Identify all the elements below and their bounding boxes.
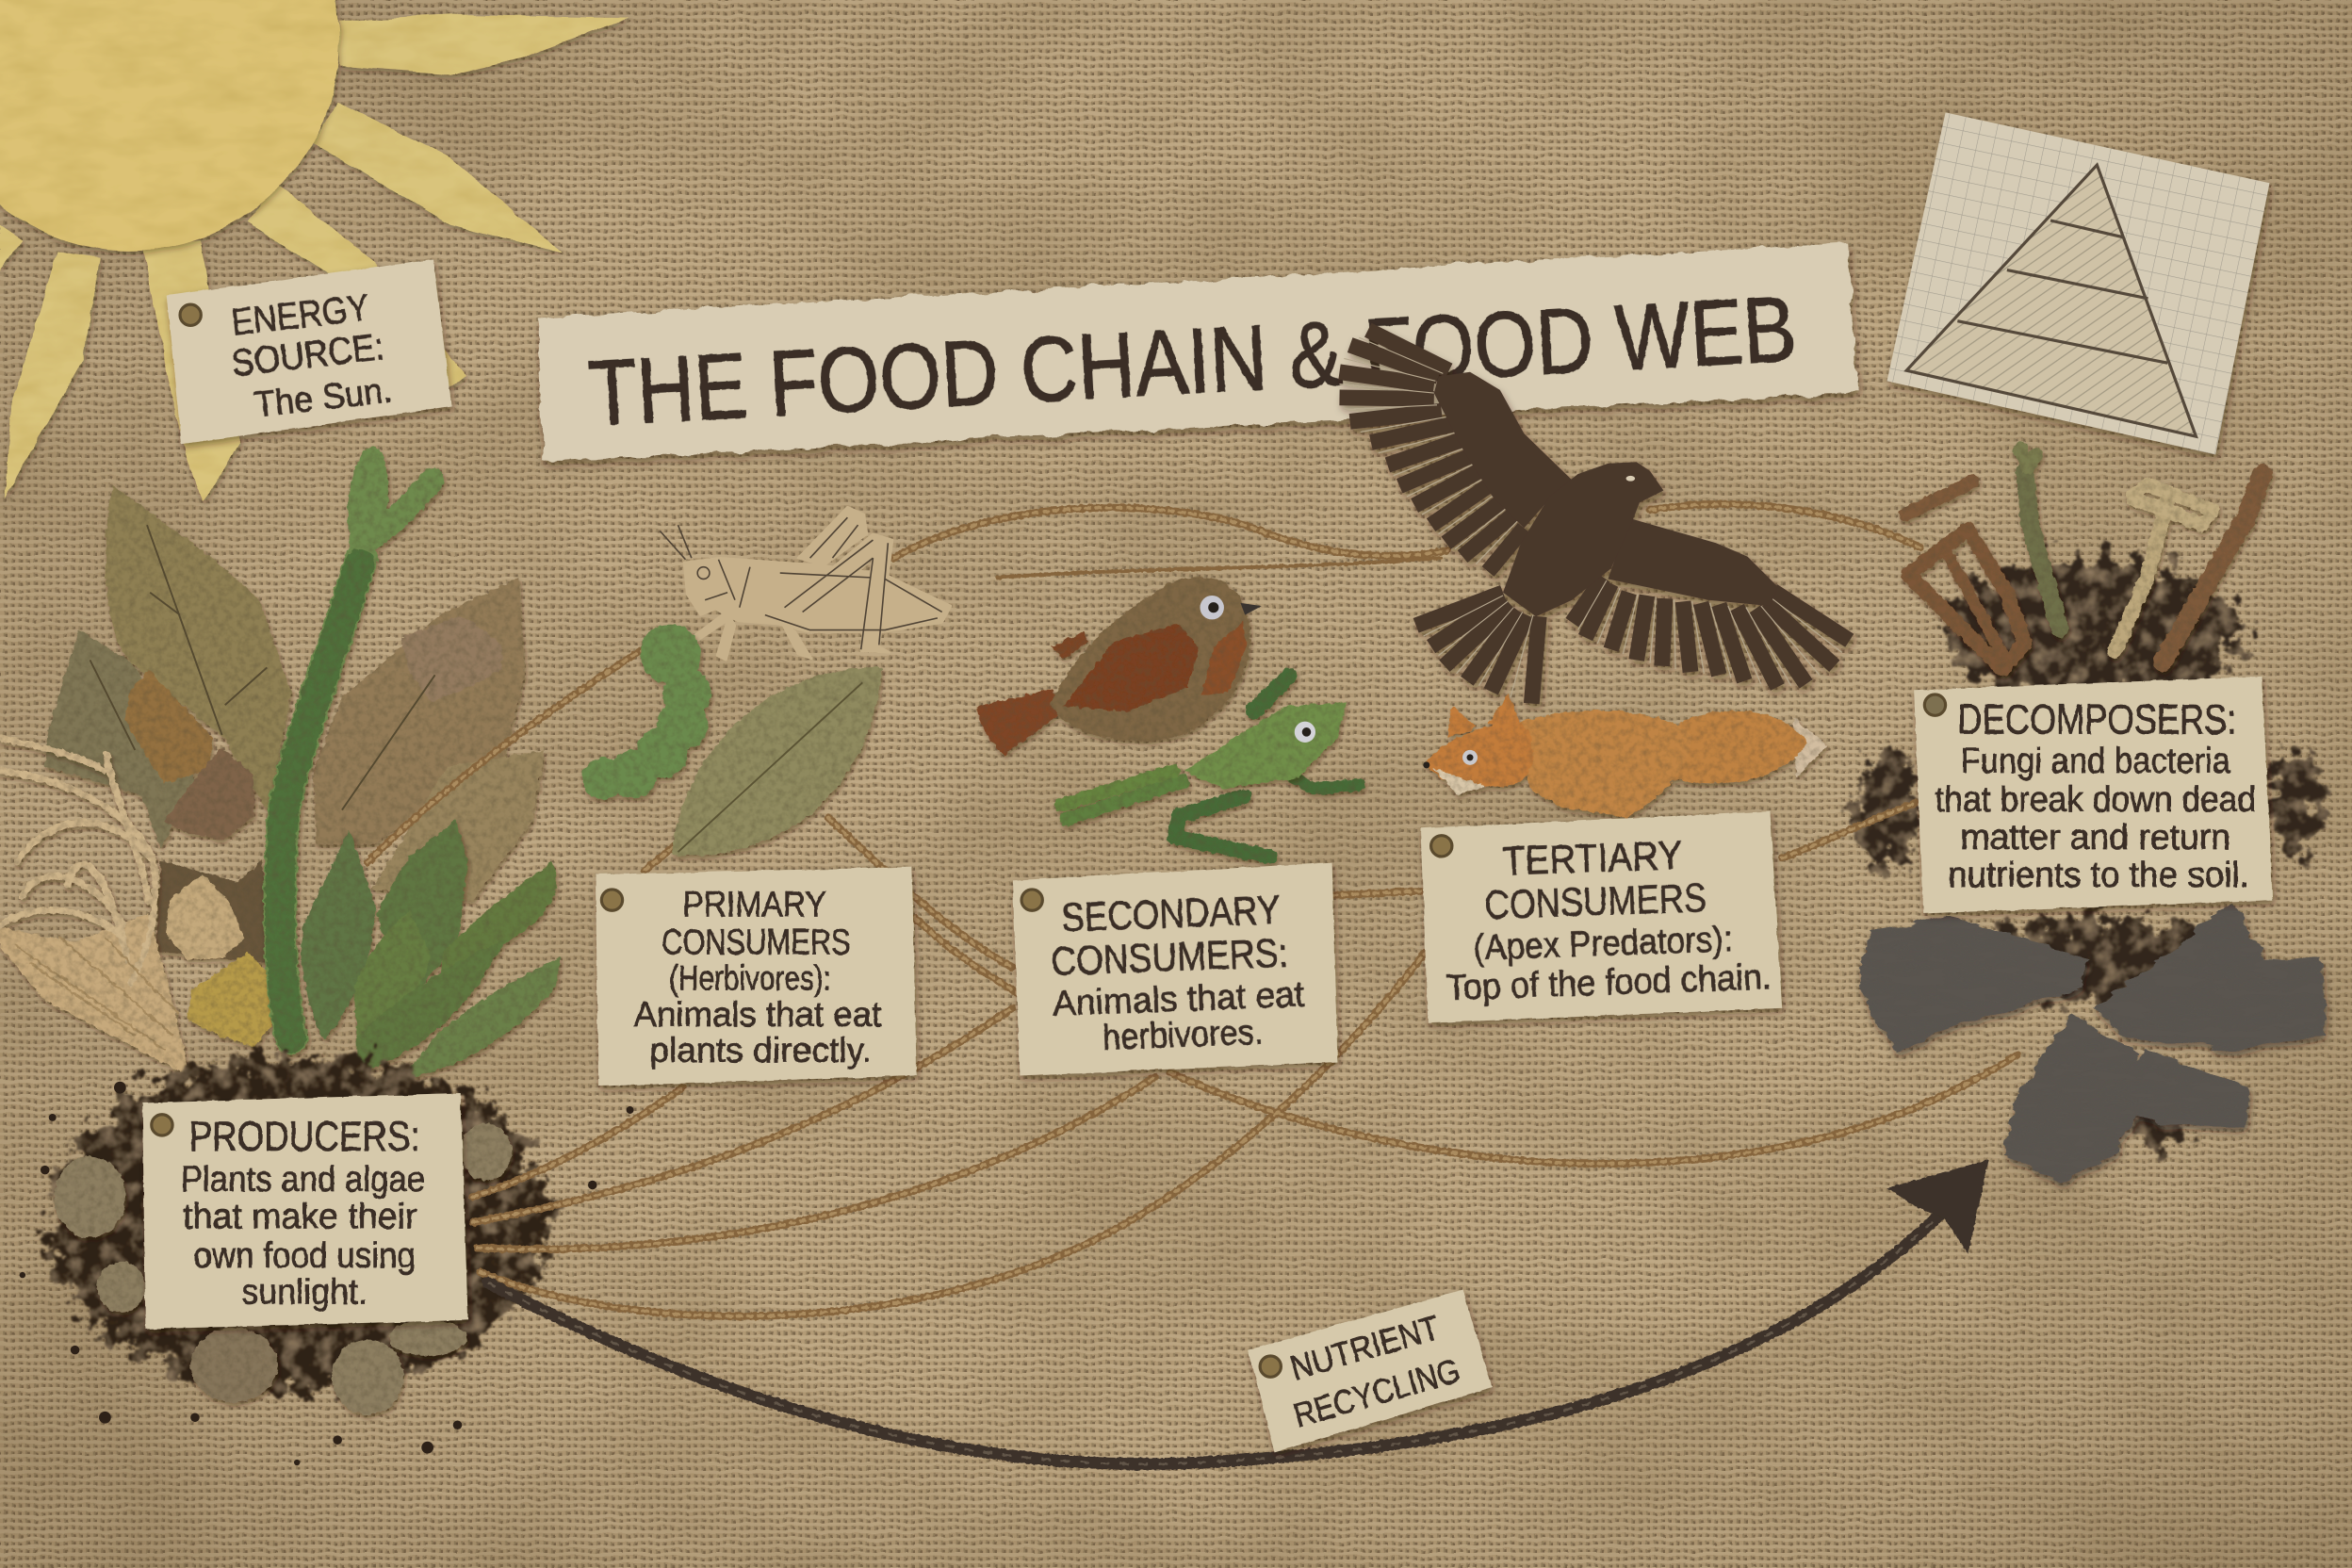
- text: [1441, 830, 1772, 1008]
- text: [634, 885, 881, 1070]
- soil mound: decomposers: [1854, 558, 2322, 1148]
- text: SOURCE:: [230, 326, 386, 384]
- icon: felt fox: [1423, 693, 1827, 818]
- right wing: [1608, 519, 1777, 606]
- dark bark scraps: [1860, 900, 2325, 1182]
- text: [225, 286, 394, 428]
- icon: paper eagle: [1340, 330, 1850, 704]
- eyelet: [1260, 1356, 1281, 1377]
- label: decomposers: [1914, 677, 2273, 913]
- left wing: [1434, 372, 1572, 528]
- text: (Herbivores):: [669, 959, 831, 998]
- text: [1286, 1308, 1464, 1435]
- plants: dried leaves and felt foliage: [0, 459, 561, 1082]
- text: Plants and algae: [181, 1159, 425, 1200]
- text: ENERGY: [229, 286, 371, 344]
- eyelet: [152, 1115, 172, 1135]
- text: Animals that eat: [1052, 974, 1305, 1024]
- left wing feathers: [1340, 330, 1524, 571]
- text: [1049, 886, 1307, 1060]
- text: CONSUMERS: [1484, 875, 1707, 928]
- sun rays: [0, 15, 627, 502]
- eye: [1626, 476, 1635, 482]
- icon: caterpillar: [582, 624, 711, 799]
- icon: bird eye and beak: [1200, 596, 1262, 619]
- tail: [1416, 593, 1539, 704]
- dried leaves: [45, 484, 545, 1047]
- icon: felt bird: [976, 577, 1250, 756]
- text: [1935, 696, 2256, 895]
- text: TERTIARY: [1502, 833, 1683, 884]
- label: energy source: [167, 259, 451, 444]
- soil specks: [20, 1082, 634, 1465]
- text: The Sun.: [253, 369, 394, 426]
- eyelet: [1924, 694, 1946, 715]
- text: Animals that eat: [634, 995, 881, 1034]
- label: nutrient recycling: [1248, 1290, 1493, 1452]
- feather separators: [1340, 337, 1842, 697]
- icon: felt frog: [1060, 677, 1359, 857]
- arrow: nutrient recycling: [487, 1159, 1989, 1464]
- text: Top of the food chain.: [1446, 956, 1772, 1008]
- pyramid: [1906, 165, 2196, 436]
- text: PRIMARY: [682, 885, 826, 925]
- text: plants directly.: [649, 1031, 872, 1070]
- text: own food using: [193, 1235, 416, 1276]
- text: that break down dead: [1935, 779, 2256, 820]
- title banner: [540, 243, 1857, 462]
- label: tertiary consumers: [1420, 811, 1782, 1023]
- text: Fungi and bacteria: [1961, 741, 2231, 781]
- icon: leaf: [672, 667, 882, 856]
- decomposer fibres: [1905, 449, 2262, 669]
- leaf veins: [90, 525, 435, 810]
- text: NUTRIENT: [1286, 1308, 1444, 1387]
- label: producers: [142, 1093, 468, 1329]
- text: matter and return: [1961, 817, 2230, 858]
- text: PRODUCERS:: [189, 1114, 420, 1160]
- sun disc: [0, 0, 339, 251]
- label: secondary consumers: [1012, 862, 1338, 1075]
- right wing feathers: [1572, 578, 1850, 687]
- text: that make their: [183, 1197, 417, 1237]
- eyelet: [1021, 890, 1042, 910]
- corn husk bundle: [0, 738, 190, 1077]
- torn paper strip: [540, 243, 1857, 462]
- text: CONSUMERS: [662, 922, 851, 962]
- eyelet: [1431, 836, 1452, 857]
- panel: energy pyramid sketch: [1887, 112, 2269, 454]
- twine food web connections: [368, 504, 2017, 1316]
- eyelet: [601, 890, 623, 910]
- text: DECOMPOSERS:: [1957, 696, 2236, 743]
- text: (Apex Predators):: [1473, 919, 1734, 969]
- soil mound: producers: [48, 1054, 552, 1391]
- text: sunlight.: [241, 1271, 368, 1312]
- felt stem: [280, 459, 432, 1038]
- icon: paper sun: [0, 0, 627, 502]
- icon: grasshopper: [660, 507, 951, 660]
- text: nutrients to the soil.: [1948, 855, 2249, 895]
- text: herbivores.: [1102, 1011, 1264, 1058]
- felt leaves: [302, 821, 561, 1082]
- text: [181, 1114, 425, 1312]
- stones: [54, 1123, 512, 1414]
- label: primary consumers: [596, 867, 917, 1086]
- eyelet: [180, 304, 201, 325]
- text: SECONDARY: [1060, 887, 1281, 940]
- text: RECYCLING: [1289, 1350, 1464, 1435]
- body and head: [1503, 462, 1663, 616]
- text: CONSUMERS:: [1050, 930, 1288, 985]
- title text: THE FOOD CHAIN & FOOD WEB: [586, 277, 1799, 446]
